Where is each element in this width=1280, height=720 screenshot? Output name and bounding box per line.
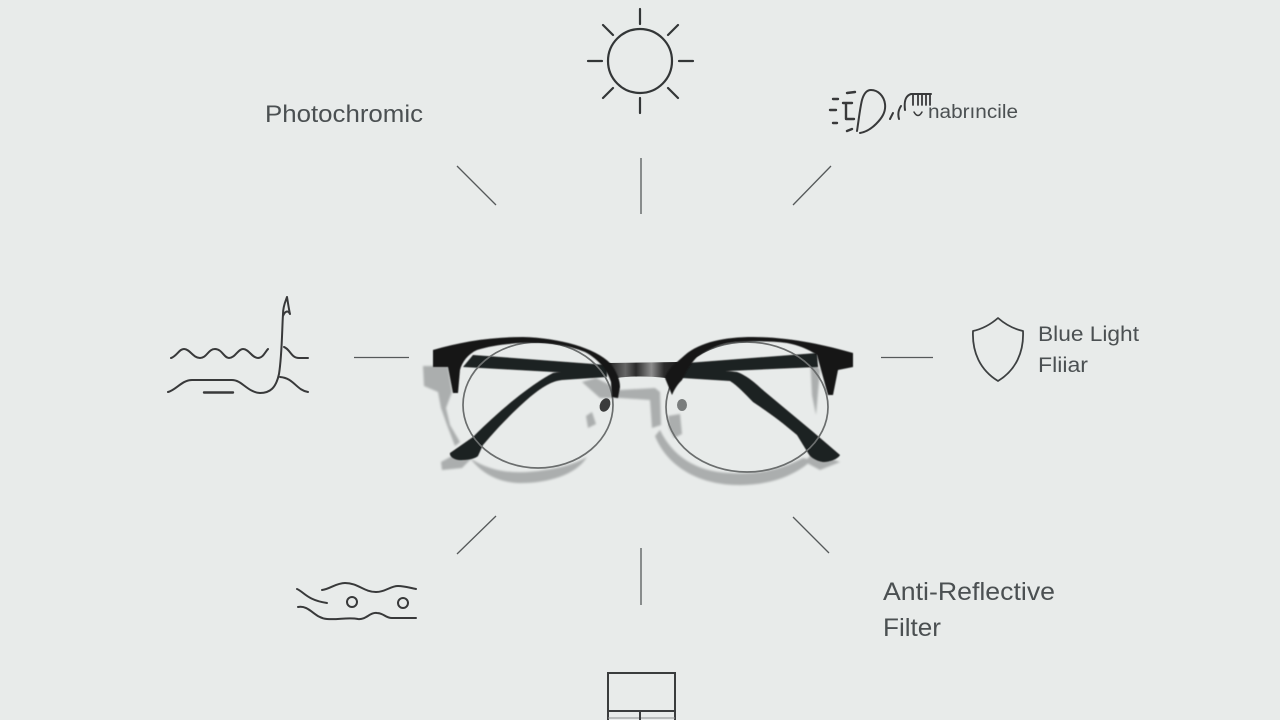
lens wire rims bbox=[463, 342, 828, 472]
nose pads bbox=[598, 397, 687, 413]
top frame rims bbox=[433, 337, 853, 398]
icon: water and reed bbox=[168, 297, 308, 393]
label: garbled filter name: nabrıncile bbox=[928, 102, 1018, 123]
icon: half dome with dashes bbox=[830, 90, 931, 133]
label line: Fliiar: Fliiar bbox=[1038, 354, 1088, 377]
label: Anti-Reflective Filter bbox=[883, 578, 1055, 642]
right nose pad bbox=[677, 399, 687, 411]
glasses shadows bbox=[423, 355, 840, 485]
icon: device screen bbox=[608, 673, 675, 720]
icon and label: top right filter bbox=[830, 90, 1018, 133]
icon: shield bbox=[973, 318, 1023, 381]
eyeglasses photo bbox=[423, 337, 853, 485]
spoke lines bbox=[354, 158, 933, 605]
icon: wavy lines with circles bbox=[297, 583, 416, 619]
icon: sun bbox=[588, 9, 693, 113]
bridge bbox=[608, 362, 678, 378]
label: Blue Light Filter bbox=[1038, 323, 1139, 377]
label: Photochromic: Photochromic bbox=[265, 101, 423, 128]
label line: Anti-Reflective: Anti-Reflective bbox=[883, 578, 1055, 606]
temple arms bbox=[450, 353, 840, 462]
label line: Blue Light: Blue Light bbox=[1038, 323, 1139, 346]
left nose pad bbox=[598, 397, 612, 413]
label line: Filter: Filter bbox=[883, 614, 941, 642]
